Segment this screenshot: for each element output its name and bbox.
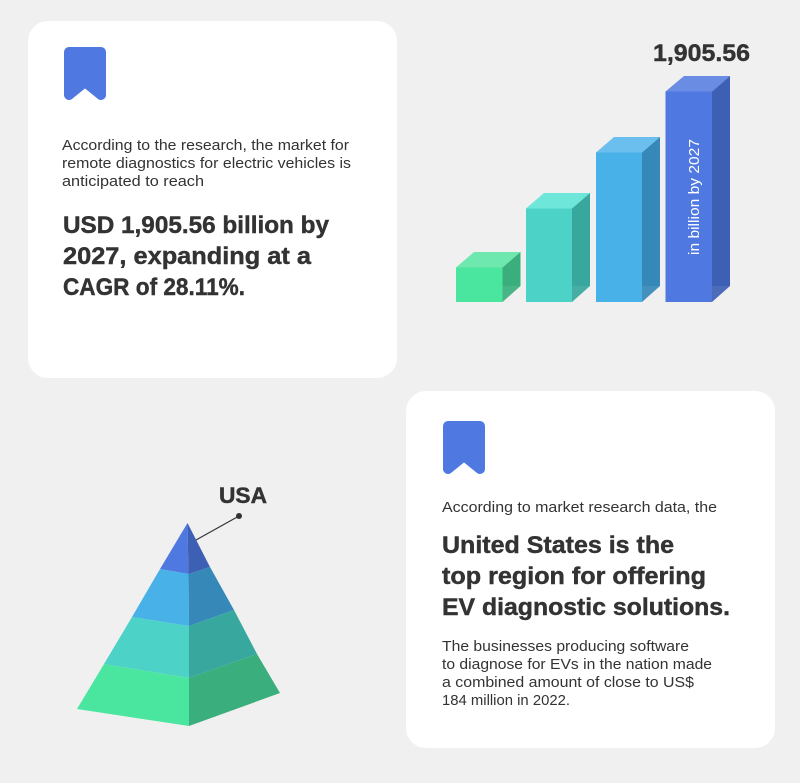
body text: to diagnose for EVs in the nation made (442, 657, 712, 673)
bar 4 (666, 76, 730, 302)
callout: USA (196, 483, 267, 540)
callout: USA: USA (219, 483, 267, 508)
bar chart: market growth (456, 40, 750, 302)
body text: 184 million in 2022. (442, 693, 570, 709)
pyramid chart: top region (77, 483, 280, 726)
bar 3 (596, 137, 660, 302)
panel: market forecast card (28, 21, 397, 378)
intro text: anticipated to reach (62, 174, 204, 190)
intro text: remote diagnostics for electric vehicles is (62, 156, 351, 172)
pyramid tier 4 (77, 654, 280, 726)
headline: market value: USD 1,905.56 billion by (63, 212, 329, 239)
icon: bookmark (448, 426, 480, 469)
body text: The businesses producing software (442, 639, 689, 655)
intro text: According to market research data, the (442, 500, 717, 516)
headline: top region: top region for offering (442, 563, 706, 590)
headline: market value: 2027, expanding at a (63, 243, 311, 270)
headline: market value (63, 212, 329, 301)
body text (442, 639, 712, 709)
pyramid tier 3 (104, 610, 257, 678)
intro text (62, 138, 351, 190)
headline: top region: United States is the (442, 532, 674, 559)
body text: a combined amount of close to US$ (442, 675, 694, 691)
value label: 1,905.56 (653, 40, 750, 67)
headline: top region (442, 532, 730, 621)
bar label: in billion by 2027 (687, 139, 703, 255)
bar 2 (526, 193, 590, 302)
intro text: According to the research, the market for (62, 138, 349, 154)
pyramid tier 2 (132, 567, 234, 626)
bar 1 (456, 252, 520, 302)
headline: market value: CAGR of 28.11%. (63, 274, 245, 301)
panel: top region card (406, 391, 775, 748)
icon: bookmark (69, 52, 101, 95)
headline: top region: EV diagnostic solutions. (442, 594, 730, 621)
pyramid tier 1 (160, 523, 210, 574)
